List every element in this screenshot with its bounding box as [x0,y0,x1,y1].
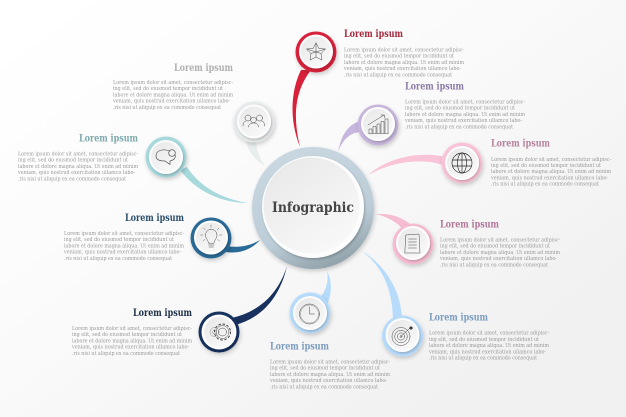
badge: chart [358,104,398,146]
connector: blue [226,240,260,252]
body text: veniam, quis nostrud exercitation ullamco labo- [63,250,181,256]
heading: Lorem ipsum [429,313,488,324]
panel: clock [269,271,390,390]
heading: Lorem ipsum [125,213,184,224]
body text: .ris nisi ut aliquip ex ea commodo consequat [72,351,181,357]
body text [428,331,549,362]
body text [63,231,184,262]
connector: pink [375,214,412,228]
badge: gears [198,312,240,352]
connector: pale grey [246,140,265,166]
heading: Lorem ipsum [405,82,464,92]
body text: ing elit, sed do eiusmod tempor incididunt ut [344,54,455,60]
body text: veniam, quis nostrud exercitation ullamco labo- [439,256,557,262]
central hub [252,147,374,269]
body text: .ris nisi ut aliquip ex ea commodo consequat [429,356,538,362]
body text: .ris nisi ut aliquip ex ea commodo consequat [64,256,173,262]
body text: labore et dolore magna aliqua. Ut enim ad minim [491,169,611,175]
connector: pink [368,155,446,175]
icon: light bulb [200,225,222,247]
body text: labore et dolore magna aliqua. Ut enim ad minim [440,250,560,256]
panel: speech head [17,134,248,203]
body text: ing elit, sed do eiusmod tempor incididunt ut [429,337,540,343]
body text: veniam, quis nostrud exercitation ullamco labo- [343,66,461,72]
badge: target [382,316,423,356]
badge: document [392,224,434,264]
badge: clock [290,292,330,334]
connector: light blue [320,271,331,303]
icon: speech head [156,150,175,164]
body text [404,100,525,130]
body text: Lorem ipsum dolor sit amet, consectetur adipisc- [344,48,464,54]
body text: veniam, quis nostrud exercitation ullamco labo- [112,99,230,105]
badge: speech head [146,136,186,178]
icon: target [392,327,412,346]
body text: Lorem ipsum dolor sit amet, consectetur adipisc- [491,157,611,163]
body text: labore et dolore magna aliqua. Ut enim ad minim [270,372,390,378]
heading: Lorem ipsum [79,134,138,144]
body text: .ris nisi ut aliquip ex ea commodo consequat [491,182,600,188]
body text: Lorem ipsum dolor sit amet, consectetur adipisc- [18,152,138,158]
body text: labore et dolore magna aliqua. Ut enim ad minim [344,60,464,66]
body text: .ris nisi ut aliquip ex ea commodo consequat [440,262,549,268]
body text: labore et dolore magna aliqua. Ut enim ad minim [429,343,549,349]
body text: labore et dolore magna aliqua. Ut enim ad minim [72,338,192,344]
body text: ing elit, sed do eiusmod tempor incididunt ut [113,86,224,92]
body text: .ris nisi ut aliquip ex ea commodo consequat [344,72,453,78]
body text: ing elit, sed do eiusmod tempor incididunt ut [64,237,175,243]
heading: Lorem ipsum [174,63,233,74]
body text: labore et dolore magna aliqua. Ut enim ad minim [18,164,138,170]
body text: Lorem ipsum dolor sit amet, consectetur adipisc- [270,360,390,366]
hub disc [262,156,364,258]
body text: labore et dolore magna aliqua. Ut enim ad minim [64,243,184,249]
heading: Lorem ipsum [440,220,499,230]
body text [343,48,464,78]
icon: bar chart [368,115,388,134]
body text: .ris nisi ut aliquip ex ea commodo consequat [270,384,379,390]
body text: ing elit, sed do eiusmod tempor incididunt ut [270,366,381,372]
body text: Lorem ipsum dolor sit amet, consectetur adipisc- [64,231,184,237]
body text: ing elit, sed do eiusmod tempor incididunt ut [440,244,551,250]
panel: people [112,63,274,166]
connector: red [293,70,311,147]
panel: light bulb [63,213,260,262]
body text: Lorem ipsum dolor sit amet, consectetur adipisc- [72,326,192,332]
icon: document [405,234,420,253]
body text: ing elit, sed do eiusmod tempor incididunt ut [491,163,602,169]
panel: star [293,29,464,147]
heading: Lorem ipsum [344,29,403,40]
connector: navy [232,266,287,325]
title: Infographic [272,200,354,216]
body text: ing elit, sed do eiusmod tempor incididunt ut [72,332,183,338]
body text: .ris nisi ut aliquip ex ea commodo consequat [113,105,222,111]
icon: clock [300,304,320,324]
body text: labore et dolore magna aliqua. Ut enim ad minim [113,92,233,98]
body text: ing elit, sed do eiusmod tempor incididunt ut [405,106,516,112]
body text [112,80,233,111]
body text: ing elit, sed do eiusmod tempor incididunt ut [18,158,129,164]
icon: people [243,115,264,127]
panel: globe [368,139,611,188]
heading: Lorem ipsum [133,308,192,319]
badge: light bulb [190,218,232,258]
connector: teal [180,167,248,203]
body text [71,326,192,357]
body text: veniam, quis nostrud exercitation ullamco labo- [71,345,189,351]
body text: .ris nisi ut aliquip ex ea commodo consequat [405,124,514,130]
body text [490,157,611,188]
body text: veniam, quis nostrud exercitation ullamco labo- [404,118,522,124]
body text: Lorem ipsum dolor sit amet, consectetur adipisc- [440,238,560,244]
badge: people [234,102,274,142]
body text: veniam, quis nostrud exercitation ullamco labo- [490,175,608,181]
badge: star [296,32,336,72]
body text [17,152,138,182]
body text: veniam, quis nostrud exercitation ullamco labo- [269,378,387,384]
panel: gears [71,266,287,357]
body text: veniam, quis nostrud exercitation ullamco labo- [17,170,135,176]
heading: Lorem ipsum [491,139,550,150]
body text [439,238,560,268]
panel: chart [338,82,525,152]
body text: Lorem ipsum dolor sit amet, consectetur adipisc- [429,331,549,337]
icon: gears [210,324,230,340]
body text: .ris nisi ut aliquip ex ea commodo consequat [18,176,127,182]
connector: light blue [362,251,402,319]
connector: purple [338,121,360,152]
body text: veniam, quis nostrud exercitation ullamco labo- [428,349,546,355]
panel: document [375,214,560,268]
panel: target [362,251,549,362]
body text [269,360,390,390]
body text: labore et dolore magna aliqua. Ut enim ad minim [405,112,525,118]
heading: Lorem ipsum [270,342,329,352]
icon: globe [452,153,472,173]
body text: Lorem ipsum dolor sit amet, consectetur adipisc- [113,80,233,86]
body text: Lorem ipsum dolor sit amet, consectetur adipisc- [405,100,525,106]
badge: globe [442,142,482,184]
hub ring [252,147,374,269]
icon: star [306,43,326,60]
